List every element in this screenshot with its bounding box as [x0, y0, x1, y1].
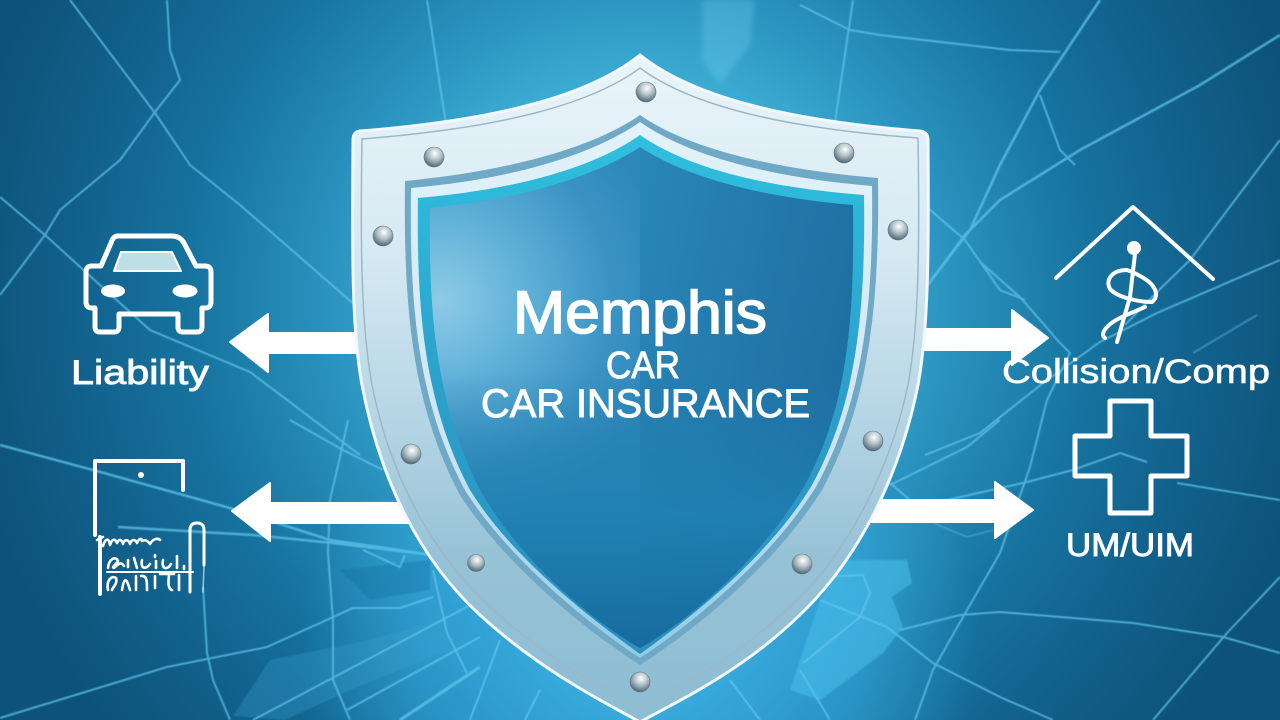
title: CAR: CAR	[606, 345, 680, 387]
label: UM/UIM: UM/UIM	[1066, 527, 1194, 563]
title: Memphis: Memphis	[513, 279, 767, 346]
roof	[1056, 207, 1213, 279]
shield cyan ring	[418, 135, 864, 654]
panel right half	[640, 147, 854, 582]
background: lighter map districts	[233, 0, 980, 720]
shield inner dark groove	[405, 115, 878, 665]
panel lower shading	[445, 393, 814, 648]
icon: car	[86, 236, 211, 332]
shield	[353, 55, 928, 720]
car windshield	[114, 252, 181, 271]
panel left half	[430, 147, 640, 467]
arrow: right to collision	[915, 310, 1048, 365]
arrow: left to document	[232, 483, 425, 541]
shield frame engraved line	[361, 68, 919, 708]
document scribbles	[97, 537, 193, 590]
snake	[1108, 270, 1156, 302]
arrow: right to UM/UIM	[860, 482, 1033, 538]
shield inner light band	[411, 122, 872, 658]
icon: document with form	[95, 461, 204, 594]
arrow: left to liability	[230, 314, 360, 372]
rivets	[373, 82, 908, 692]
label: Collision/Comp: Collision/Comp	[1002, 353, 1270, 391]
shield inner panel	[420, 140, 865, 660]
shield outer metal frame	[353, 55, 928, 720]
title: CAR INSURANCE: CAR INSURANCE	[481, 382, 810, 426]
icon: roof with medical caduceus	[1056, 207, 1213, 342]
car headlights	[101, 284, 198, 298]
icon: medical cross	[1075, 401, 1187, 513]
staff with ball	[1128, 242, 1140, 254]
label: Liability: Liability	[71, 354, 209, 392]
